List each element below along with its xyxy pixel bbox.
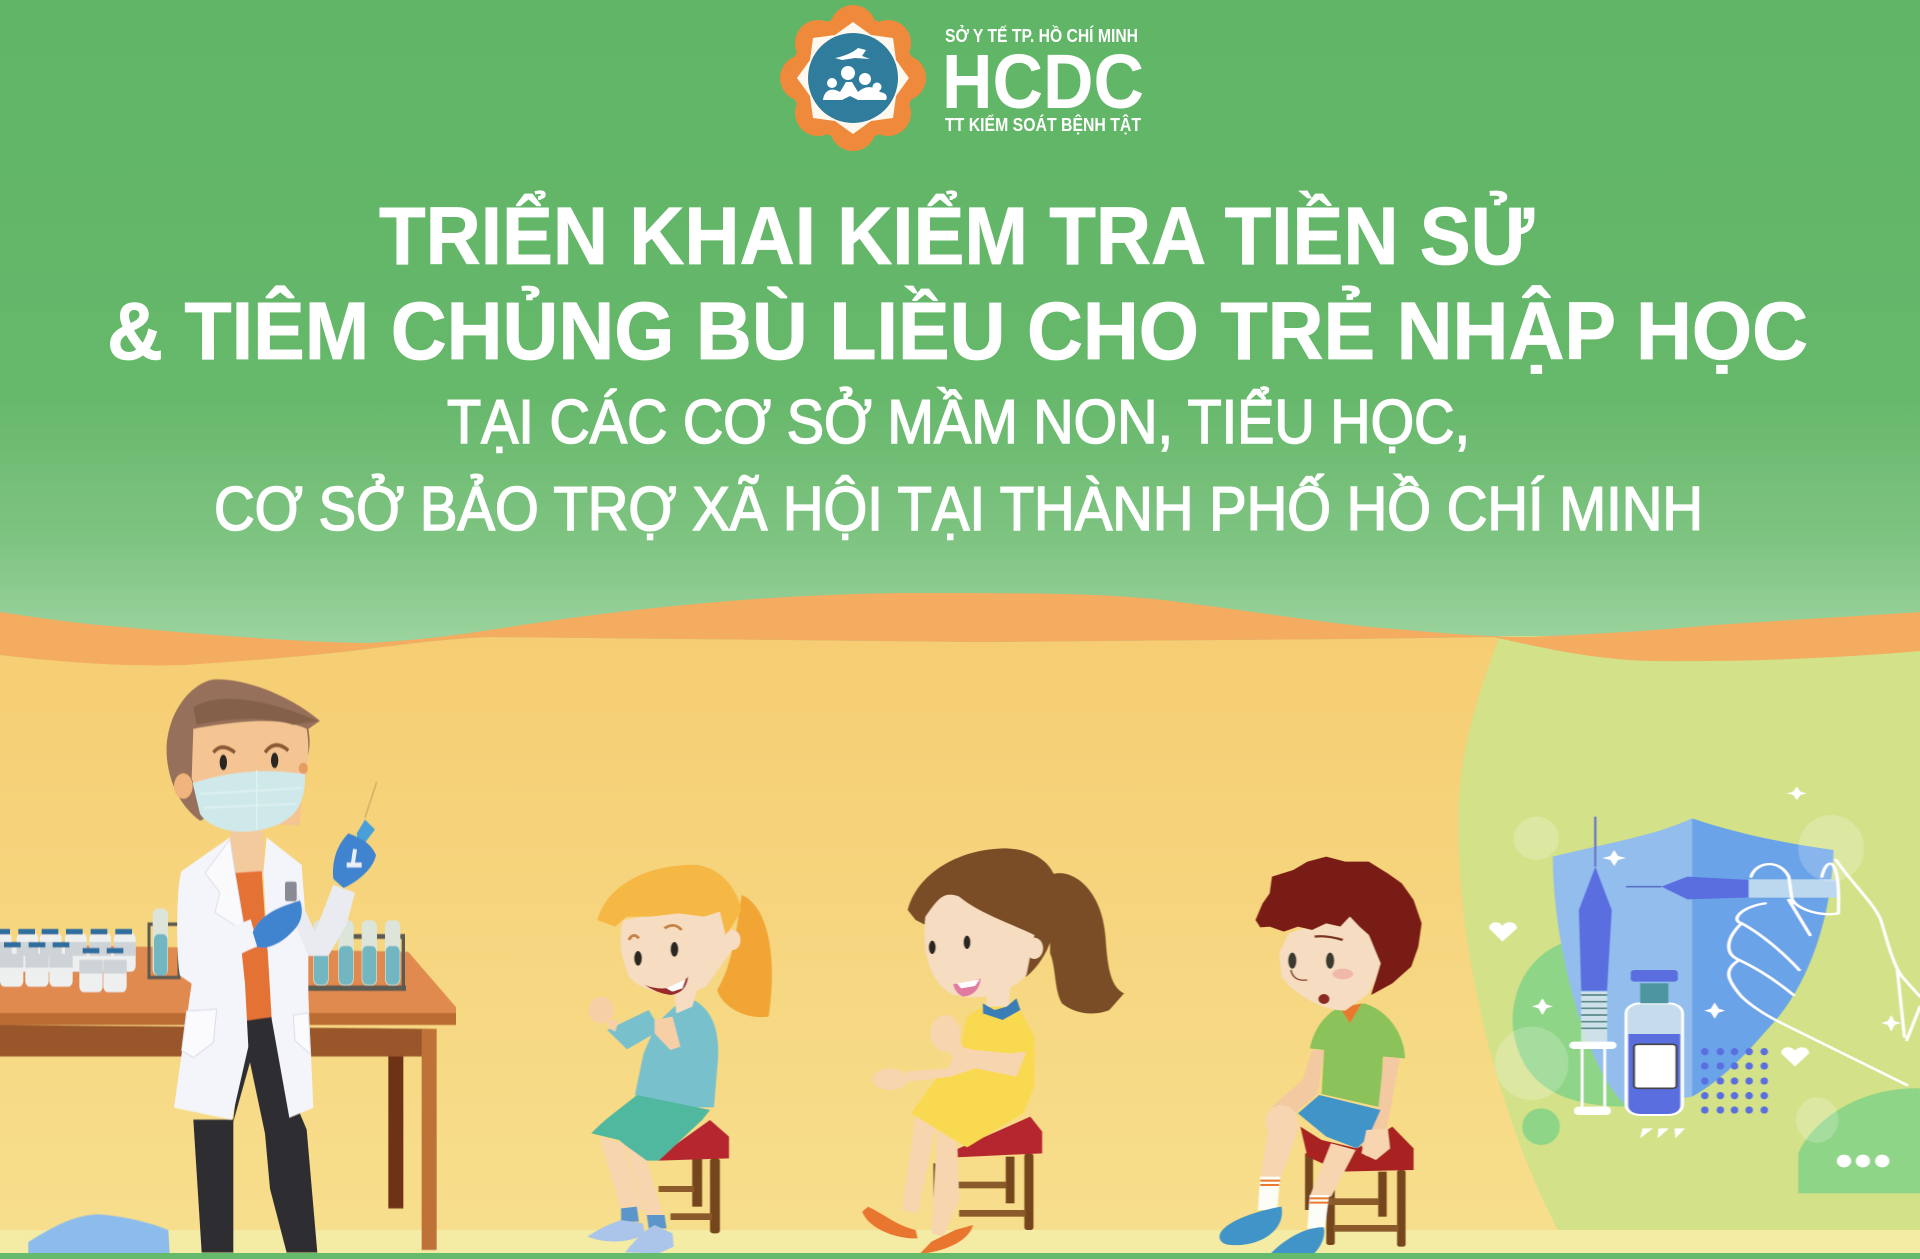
green floor line bbox=[0, 1253, 1920, 1259]
blonde girl bbox=[587, 865, 772, 1253]
subtitle bbox=[214, 388, 1703, 544]
stool bbox=[1300, 1127, 1414, 1247]
background: green header gradient bbox=[0, 0, 1920, 660]
logo text: HCDC: HCDC bbox=[942, 39, 1144, 125]
illustration: children bbox=[587, 848, 1124, 1254]
vaccine vials on table bbox=[0, 929, 136, 992]
test tube racks bbox=[149, 908, 406, 991]
logo text: department: SỞ Y TẾ TP. HỒ CHÍ MINH bbox=[945, 25, 1138, 46]
logo text: center name: TT KIỂM SOÁT BỆNH TẬT bbox=[945, 114, 1141, 135]
horizontal syringe bbox=[1626, 877, 1838, 899]
doctor bbox=[167, 679, 377, 1253]
title line 2: & TIÊM CHỦNG BÙ LIỀU CHO TRẺ NHẬP HỌC bbox=[107, 285, 1808, 377]
stool bbox=[659, 1120, 729, 1233]
vaccine graphic bbox=[1489, 787, 1920, 1193]
subtitle line 1: TẠI CÁC CƠ SỞ MẦM NON, TIỂU HỌC, bbox=[447, 388, 1470, 457]
green blobs bbox=[1513, 940, 1920, 1193]
stool bbox=[933, 1117, 1042, 1230]
background: yellow lower panel bbox=[0, 637, 1920, 1259]
hand outline bbox=[1729, 860, 1920, 1085]
icon: HCDC flower emblem bbox=[780, 5, 926, 151]
vertical syringe bbox=[1569, 817, 1617, 1115]
purple dot grid bbox=[1701, 1048, 1768, 1114]
illustration: doctor and vaccine table bbox=[0, 679, 456, 1259]
brunette girl bbox=[862, 848, 1124, 1254]
hearts and sparkles bbox=[1489, 787, 1901, 1167]
doctor head bbox=[167, 679, 320, 832]
table bbox=[0, 944, 456, 1250]
boy bbox=[1220, 857, 1422, 1259]
vial bbox=[1626, 970, 1683, 1115]
floor strip bbox=[0, 1230, 1920, 1254]
logo: HCDC bbox=[780, 5, 1144, 151]
illustration: boy and vaccine graphic bbox=[1220, 787, 1920, 1259]
panel: light green vaccine background bbox=[1458, 636, 1920, 1230]
title line 1: TRIỂN KHAI KIỂM TRA TIỀN SỬ bbox=[379, 191, 1535, 282]
face mask on floor bbox=[28, 1214, 170, 1259]
subtitle line 2: CƠ SỞ BẢO TRỢ XÃ HỘI TẠI THÀNH PHỐ HỒ CHÍ MINH bbox=[214, 475, 1703, 544]
shield bbox=[1553, 818, 1834, 1107]
orange wave band bbox=[0, 593, 1920, 665]
translucent bubbles bbox=[1495, 815, 1864, 1143]
title bbox=[107, 191, 1808, 377]
